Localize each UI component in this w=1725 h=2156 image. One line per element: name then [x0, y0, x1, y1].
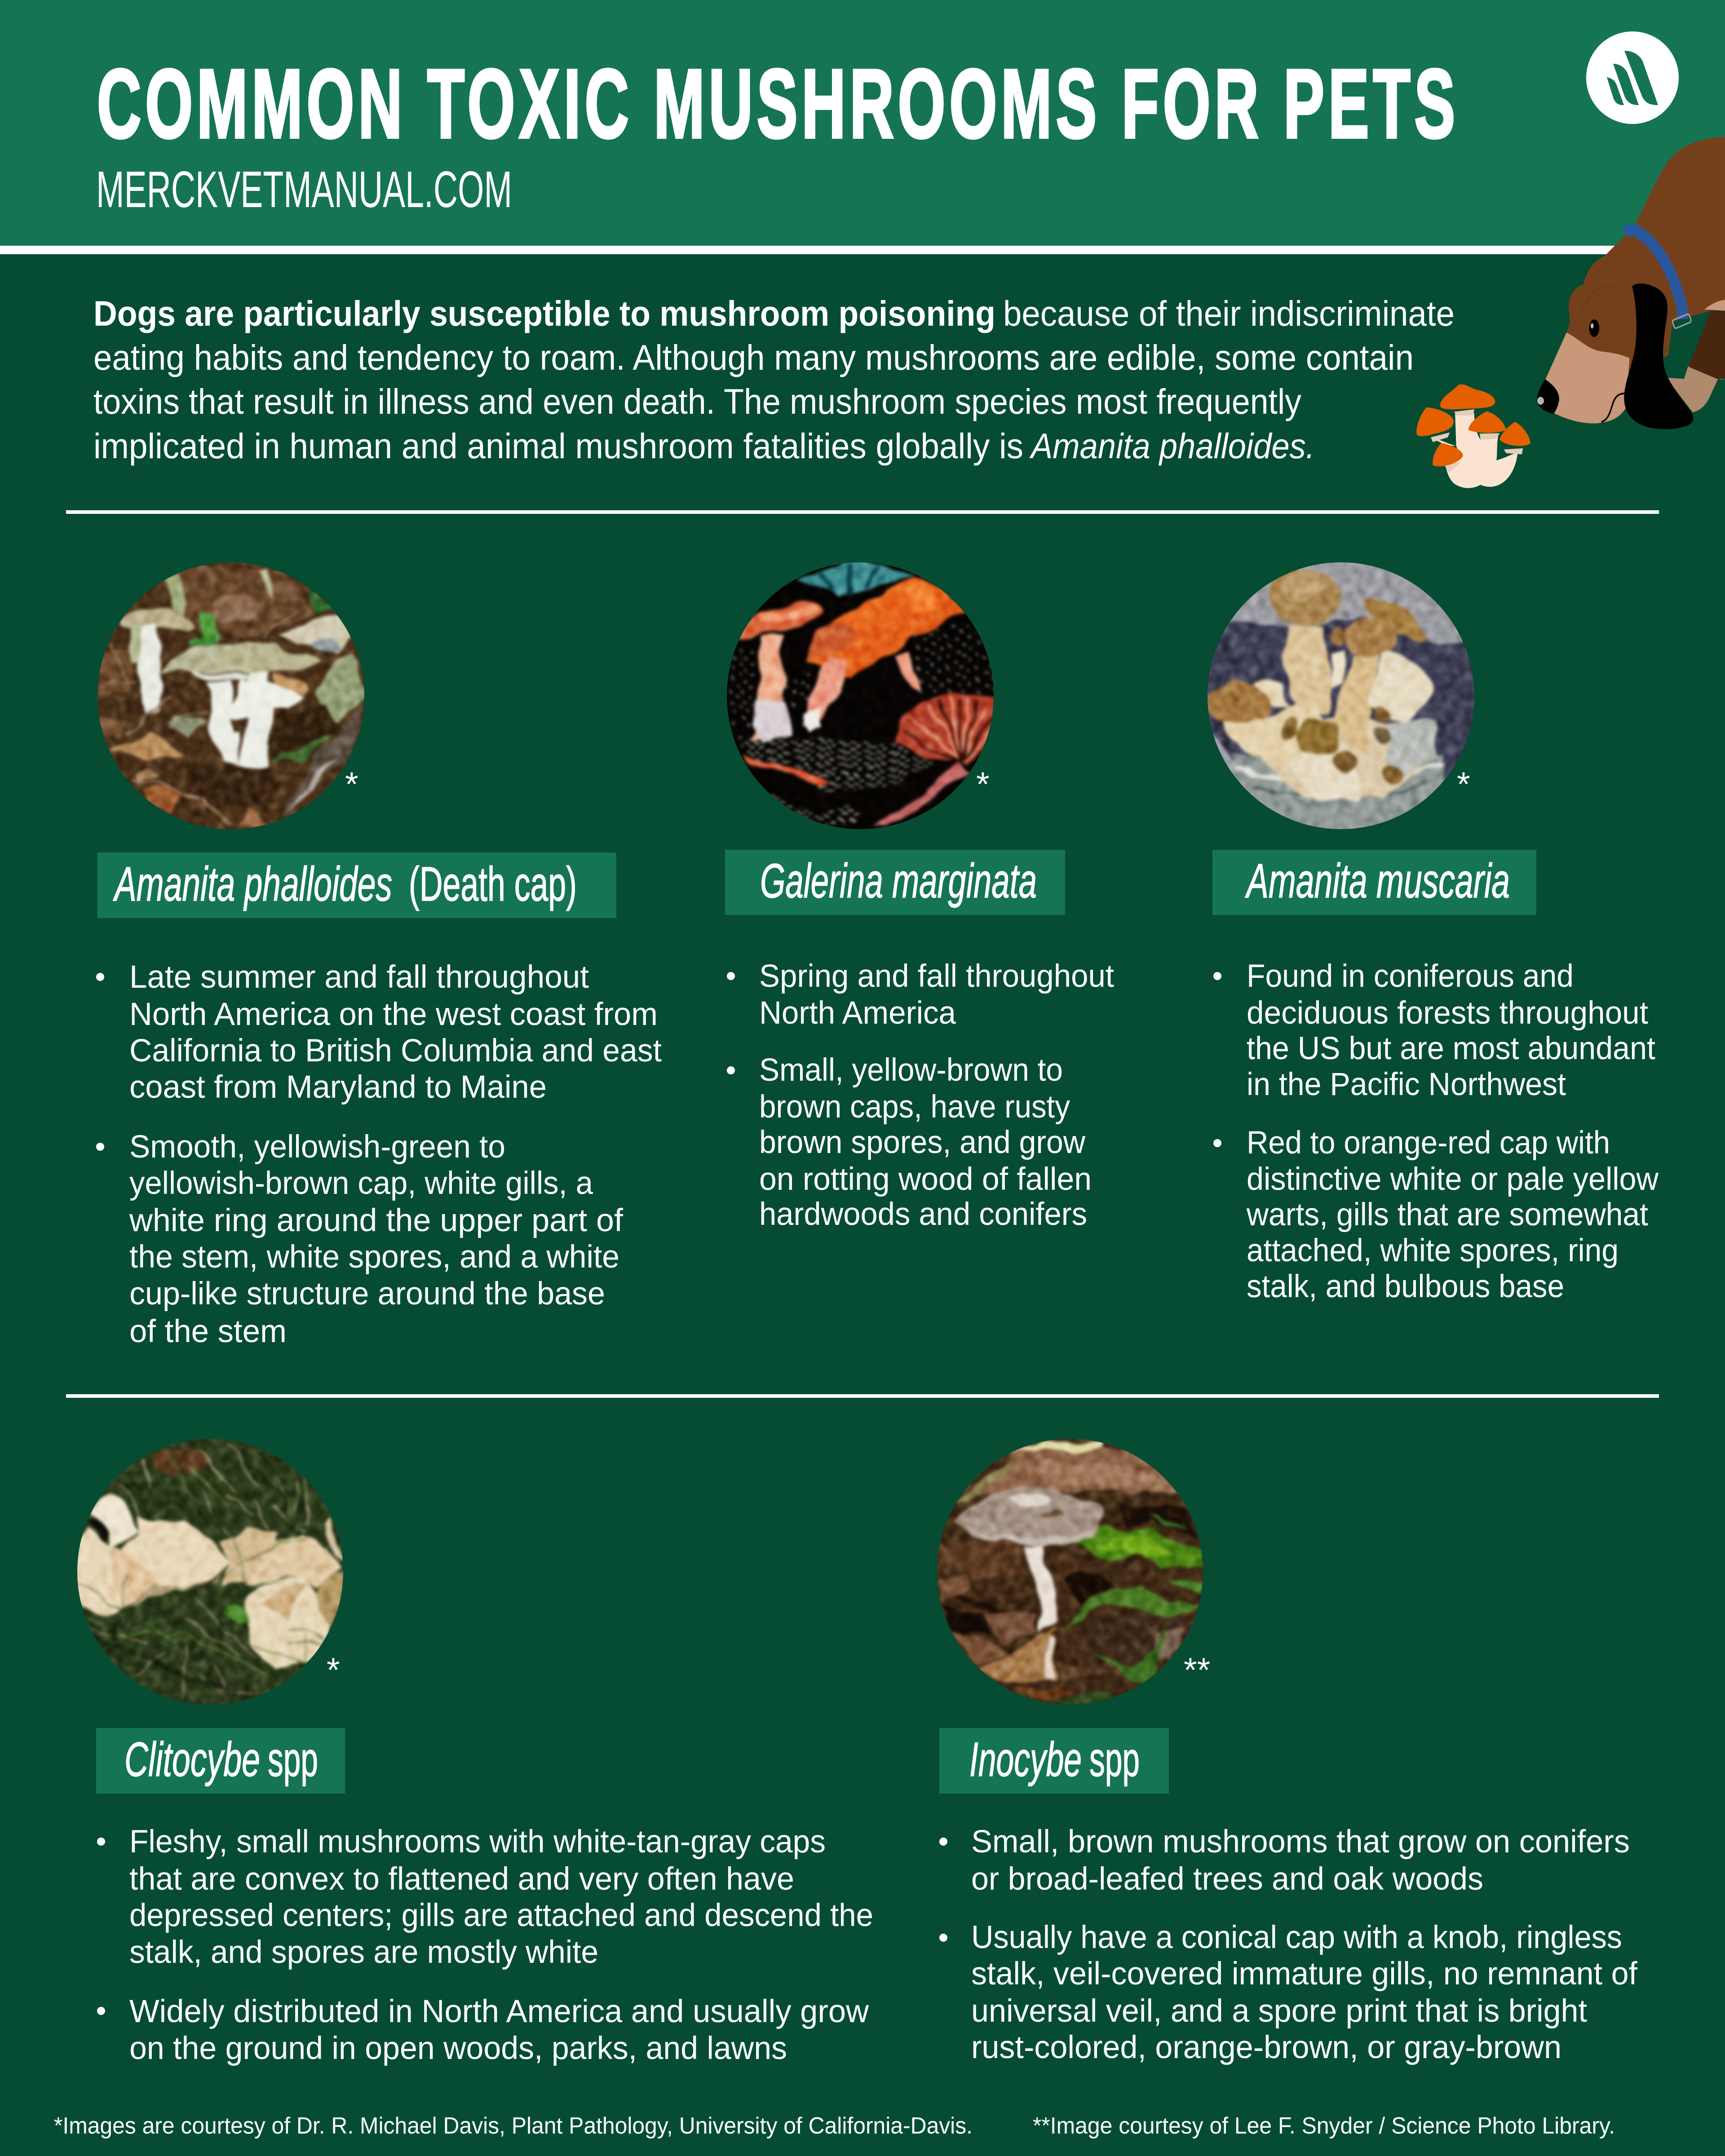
panel: Inocybe spp [924, 1427, 1637, 2065]
photo: Inocybe [924, 1427, 1215, 1718]
panel: Clitocybe spp [66, 1428, 873, 2066]
photo: Galerina marginata [727, 562, 994, 829]
species label [725, 850, 1065, 915]
bullet: appearance: rust-colored, orange-brown, or gray-brown [971, 2030, 1561, 2065]
bullet: appearance: brown spores, and grow [759, 1125, 1086, 1160]
subtitle: website: MERCKVETMANUAL.COM [96, 161, 512, 218]
bullet: appearance: of the stem [129, 1314, 287, 1349]
footnote asterisk: * [345, 765, 358, 804]
bullet: distribution [97, 1994, 869, 2066]
footnote: image credit Snyder: **Image courtesy of Lee F. Snyder / Science Photo Library. [1033, 2113, 1615, 2139]
bullet: habitat: Found in coniferous and [1247, 959, 1574, 994]
intro paragraph: eating habits and tendency to roam. Although many mushrooms are edible, some contain [93, 337, 1414, 377]
intro paragraph: implicated in human and animal mushroom fatalities globally is [93, 426, 1023, 466]
bullet: season and range: California to British Columbia and east [129, 1033, 662, 1069]
footnote: image credit Davis: *Images are courtesy of Dr. R. Michael Davis, Plant Pathology, University of California-Davis. [54, 2113, 973, 2139]
bullet: appearance: universal veil, and a spore print that is bright [971, 1993, 1587, 2029]
bullet: season and range: North America on the west coast from [129, 997, 658, 1032]
bullet: appearance: Small, yellow-brown to [759, 1052, 1063, 1088]
bullet: appearance: hardwoods and conifers [759, 1197, 1087, 1232]
bullet: season and range [96, 959, 662, 1105]
species label: Amanita muscaria [1245, 853, 1510, 908]
bullet: appearance: Fleshy, small mushrooms with white-tan-gray caps [129, 1824, 826, 1860]
icon: Merck logo [1586, 31, 1679, 124]
bullet: appearance: Red to orange-red cap with [1247, 1125, 1610, 1161]
species label [939, 1728, 1169, 1794]
bullet: appearance: yellowish-brown cap, white gills, a [129, 1166, 593, 1201]
bullet: appearance: stalk, veil-covered immature gills, no remnant of [971, 1956, 1637, 1992]
species label: spp [1089, 1732, 1140, 1786]
illustration: orange mushrooms [1416, 384, 1530, 488]
intro paragraph: because of their indiscriminate [1003, 293, 1455, 333]
bullet: distribution: on the ground in open woods, parks, and lawns [129, 2031, 787, 2066]
species label: Clitocybe [124, 1732, 260, 1786]
bullet: distribution: Widely distributed in North America and usually grow [129, 1994, 869, 2029]
panel: Amanita phalloides [81, 549, 662, 1349]
bullet: season and range: Spring and fall throughout [759, 959, 1114, 994]
bullet: appearance: depressed centers; gills are attached and descend the [129, 1898, 873, 1933]
bullet: appearance: that are convex to flattened and very often have [129, 1861, 794, 1897]
bullet: appearance: distinctive white or pale yellow [1247, 1162, 1659, 1197]
panel: Amanita muscaria [1197, 552, 1659, 1304]
bullet: habitat [939, 1824, 1630, 1897]
bullet: appearance: white ring around the upper part of [129, 1203, 623, 1238]
panel: Galerina marginata [717, 552, 1114, 1232]
photo: Clitocybe [77, 1439, 343, 1705]
species label: (Death cap) [409, 857, 577, 911]
bullet: habitat: Small, brown mushrooms that grow on conifers [971, 1824, 1630, 1860]
bullet: appearance: Usually have a conical cap with a knob, ringless [971, 1920, 1622, 1955]
bullet: habitat: deciduous forests throughout [1247, 995, 1648, 1031]
footnote asterisks: ** [1184, 1651, 1210, 1689]
species label: Inocybe [969, 1732, 1082, 1786]
intro paragraph: Amanita phalloides. [1029, 426, 1315, 466]
bullet: appearance: brown caps, have rusty [759, 1089, 1070, 1125]
bullet: season and range: coast from Maryland to Maine [129, 1069, 547, 1105]
bullet: appearance [97, 1824, 873, 1970]
bullet: appearance: cup-like structure around the base [129, 1276, 605, 1312]
bullet: appearance: attached, white spores, ring [1247, 1233, 1619, 1268]
bullet: habitat [1213, 959, 1655, 1102]
bullet: appearance [96, 1129, 623, 1349]
bullet: appearance: stalk, and spores are mostly white [129, 1935, 598, 1970]
intro paragraph: Dogs are particularly susceptible to mushroom poisoning [93, 293, 995, 333]
header band [0, 0, 1725, 254]
bullet: habitat: or broad-leafed trees and oak woods [971, 1861, 1483, 1897]
species label [97, 853, 616, 918]
bullet: habitat: in the Pacific Northwest [1247, 1067, 1566, 1102]
bullet: season and range [727, 959, 1114, 1031]
divider [66, 510, 1659, 514]
footnote asterisk: * [976, 765, 990, 804]
footnote asterisk: * [1457, 765, 1470, 804]
species label: Galerina marginata [760, 853, 1037, 908]
bullet: appearance: warts, gills that are somewhat [1246, 1197, 1648, 1233]
species label: spp [268, 1732, 318, 1786]
bullet: appearance [727, 1052, 1092, 1232]
bullet: appearance: Smooth, yellowish-green to [129, 1129, 505, 1165]
species label [1212, 850, 1536, 915]
bullet: appearance [1213, 1125, 1659, 1304]
footnote asterisk: * [327, 1651, 340, 1689]
intro paragraph: toxins that result in illness and even death. The mushroom species most frequently [93, 381, 1301, 421]
divider [66, 1394, 1659, 1398]
bullet: season and range: North America [759, 995, 956, 1031]
bullet: appearance: the stem, white spores, and a white [129, 1239, 619, 1275]
species label [96, 1728, 345, 1794]
bullet: appearance: on rotting wood of fallen [759, 1162, 1092, 1197]
photo: Amanita muscaria [1208, 562, 1474, 829]
bullet: habitat: the US but are most abundant [1247, 1031, 1655, 1066]
intro paragraph [93, 293, 1455, 466]
illustration: dog sniffing [1537, 137, 1725, 429]
bullet: appearance [939, 1920, 1637, 2065]
bullet: appearance: stalk, and bulbous base [1247, 1269, 1564, 1304]
photo: Amanita phalloides [97, 562, 364, 829]
bullet: season and range: Late summer and fall throughout [129, 959, 589, 995]
species label: Amanita phalloides [113, 857, 392, 911]
